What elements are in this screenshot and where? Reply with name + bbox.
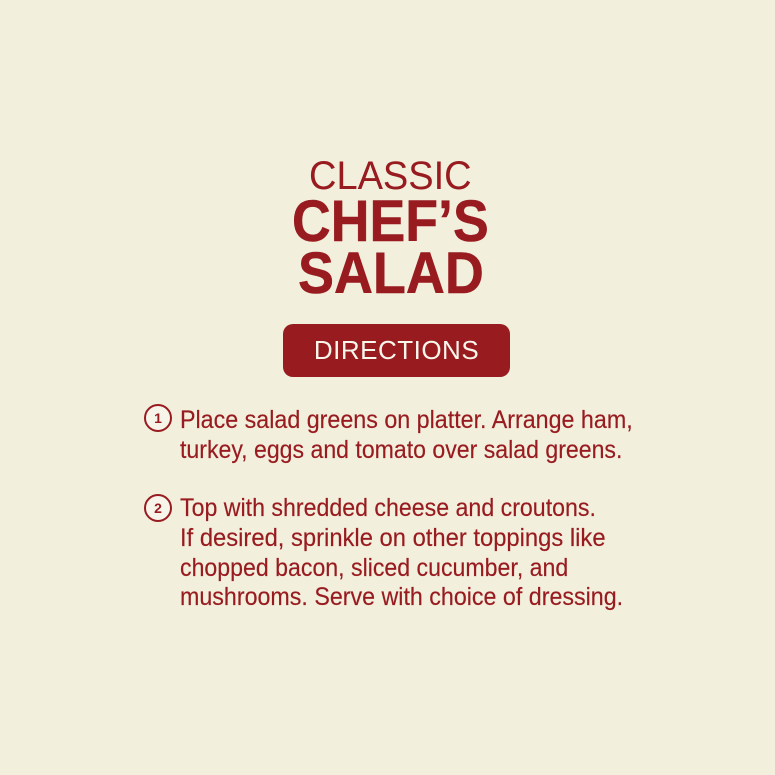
step 2 bbox=[144, 494, 623, 611]
icon: number 2: 2 bbox=[154, 500, 162, 516]
directions badge: DIRECTIONS bbox=[314, 334, 479, 364]
icon: number 1 bbox=[144, 404, 172, 432]
step 1 text: Place salad greens on platter. Arrange ham, bbox=[180, 406, 633, 434]
step 2 text bbox=[180, 494, 623, 611]
step 1 text bbox=[180, 406, 633, 464]
title line: chef's: CHEF’S bbox=[292, 189, 489, 254]
title bbox=[292, 154, 489, 306]
title line: classic: CLASSIC bbox=[308, 154, 471, 198]
step 2 text: Top with shredded cheese and croutons. bbox=[180, 494, 596, 522]
step 1 text: turkey, eggs and tomato over salad greens. bbox=[180, 436, 622, 464]
step 1 bbox=[144, 404, 633, 464]
title line: salad: SALAD bbox=[298, 241, 484, 306]
step 2 text: If desired, sprinkle on other toppings like bbox=[180, 524, 606, 552]
step 2 text: chopped bacon, sliced cucumber, and bbox=[180, 554, 568, 582]
directions badge bbox=[283, 324, 510, 377]
step 2 text: mushrooms. Serve with choice of dressing. bbox=[180, 583, 623, 611]
icon: number 1: 1 bbox=[154, 410, 162, 426]
icon: number 2 bbox=[144, 494, 172, 522]
